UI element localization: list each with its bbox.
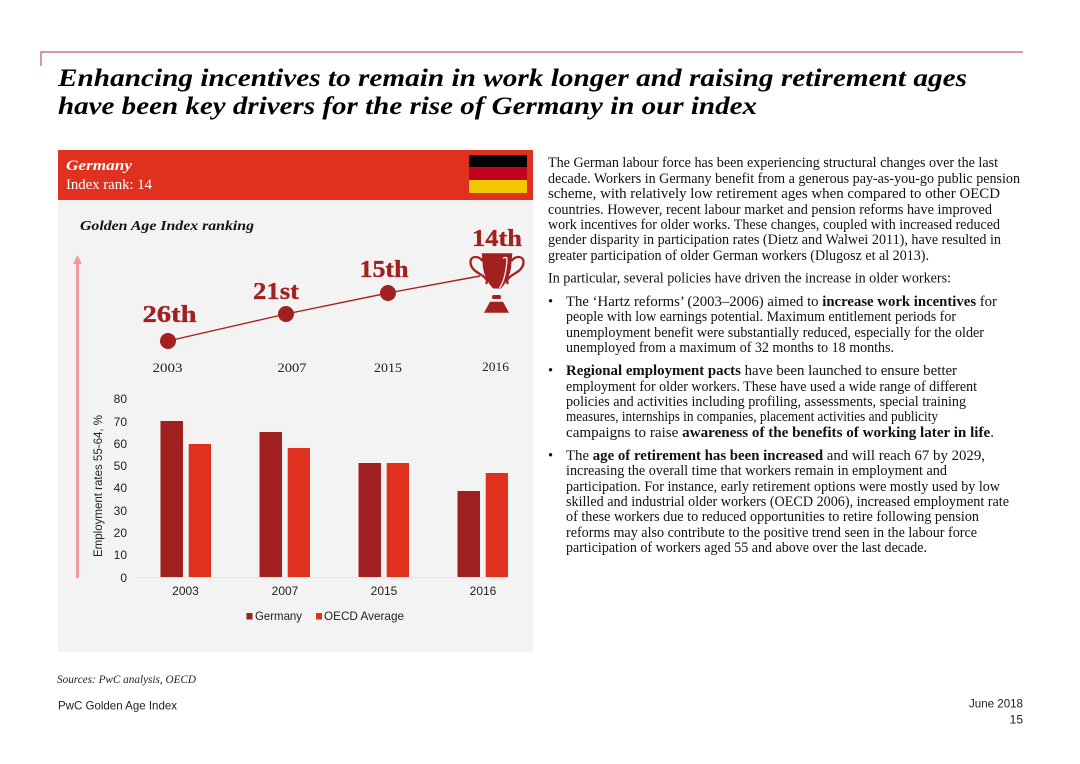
title: have been key drivers for the rise of Germany in our index [58, 91, 757, 120]
legend: OECD Average [324, 609, 404, 623]
intro paragraph: decade. Workers in Germany benefit from a generous pay-as-you-go public pension [548, 171, 1021, 187]
y axis labels: 30 [114, 504, 127, 518]
y axis labels: 10 [114, 548, 127, 562]
intro paragraph: The German labour force has been experiencing structural changes over the last [548, 155, 998, 171]
bullet: age of retirement: • [548, 448, 553, 464]
bullet: age of retirement: skilled and industrial older workers (OECD 2006), increased employment rate [566, 494, 1009, 510]
y axis labels: 20 [114, 526, 127, 540]
intro paragraph: countries. However, recent labour market and pension reforms have improved [548, 202, 993, 218]
ranking line chart: 26th [142, 302, 196, 328]
y axis labels: 50 [114, 459, 127, 473]
bars: 2003 [160, 421, 211, 577]
x axis labels: 2003 [172, 584, 199, 598]
sources note: Sources: PwC analysis, OECD [57, 674, 197, 686]
x axis labels: 2007 [272, 584, 299, 598]
y axis labels: 0 [120, 571, 127, 585]
title [57, 63, 967, 120]
y axis labels [114, 392, 127, 585]
bullet: regional employment pacts: employment for older workers. These have used a wide range of different [566, 379, 977, 395]
ranking line chart: 14th [472, 226, 522, 252]
x axis labels: 2016 [470, 584, 497, 598]
bars: 2007 [260, 432, 310, 577]
bullet: age of retirement [548, 448, 1009, 556]
arrow: upward improvement [73, 255, 82, 578]
bullet: Hartz reforms: The ‘Hartz reforms’ (2003–2006) aimed to increase work incentives for [566, 294, 997, 310]
legend: Germany [255, 609, 302, 623]
icon: German flag [469, 155, 527, 193]
intro paragraph [548, 155, 1021, 264]
panel header [58, 150, 533, 200]
ranking line chart: 21st [253, 279, 299, 305]
bullet: Hartz reforms: unemployment benefit were substantially reduced, especially for the older [566, 325, 984, 341]
bullet: age of retirement: The age of retirement has been increased and will reach 67 by 2029, [566, 448, 985, 464]
intro paragraph: greater participation of older German workers (Dlugosz et al 2013). [548, 248, 929, 264]
bullet: regional employment pacts: • [548, 363, 553, 379]
bullet: Hartz reforms: people with low earnings potential. Maximum entitlement periods for [566, 309, 956, 325]
title: Enhancing incentives to remain in work longer and raising retirement ages [57, 63, 967, 92]
bars: 2015 [358, 463, 409, 577]
intro paragraph: gender disparity in participation rates (Dietz and Walwei 2011), have resulted in [548, 232, 1002, 248]
ranking line chart: 15th [360, 257, 408, 283]
x axis labels: 2015 [371, 584, 398, 598]
bullet: age of retirement: reforms may also contribute to the positive trend seen in the labour force [566, 525, 977, 541]
ranking line chart: 2003 [152, 360, 182, 375]
panel header: Germany [66, 158, 132, 174]
bullet: Hartz reforms: • [548, 294, 553, 310]
bullet: regional employment pacts: measures, internships in companies, placement activities and publicity [566, 409, 939, 425]
ranking line chart [142, 226, 522, 375]
bullet: regional employment pacts: policies and activities including profiling, assessments, special training [566, 394, 966, 410]
lead-in sentence: In particular, several policies have driven the increase in older workers: [548, 270, 951, 286]
footer: page number: 15 [1010, 712, 1023, 726]
ranking line chart: 2016 [482, 359, 510, 374]
y axis labels: 70 [114, 415, 127, 429]
bullet: regional employment pacts [548, 363, 994, 441]
bullet: Hartz reforms: unemployed from a maximum of 32 months to 18 months. [566, 340, 894, 356]
y axis labels: 80 [114, 392, 127, 406]
ranking heading: Golden Age Index ranking [80, 219, 254, 234]
intro paragraph: scheme, with relatively low retirement ages when compared to other OECD [548, 186, 1000, 202]
footer: date: June 2018 [969, 696, 1023, 710]
y axis title: Employment rates 55-64, % [91, 415, 105, 557]
panel header: Index rank: 14 [66, 177, 152, 193]
legend [246, 609, 404, 623]
x axis labels [172, 584, 497, 598]
icon: trophy [470, 253, 524, 313]
bullet: regional employment pacts: Regional employment pacts have been launched to ensure better [566, 363, 957, 379]
bullet: age of retirement: increasing the overall time that workers remain in employment and [566, 463, 948, 479]
y axis labels: 40 [114, 481, 127, 495]
bullet: Hartz reforms [548, 294, 997, 356]
bullet: age of retirement: of these workers due to reduced opportunities to retire following pension [566, 509, 980, 525]
bullet: age of retirement: participation of workers aged 55 and above over the last decade. [566, 540, 927, 556]
bars: 2016 [458, 473, 508, 577]
footer: report name: PwC Golden Age Index [58, 698, 177, 712]
bullet: age of retirement: participation. For instance, early retirement options were mostly used by low [566, 479, 1001, 495]
y axis labels: 60 [114, 437, 127, 451]
ranking line chart: 2015 [374, 360, 402, 375]
panel: Germany profile [58, 150, 533, 652]
bullet: regional employment pacts: campaigns to raise awareness of the benefits of working later in life . [566, 425, 994, 441]
bar chart: employment rates [91, 392, 508, 623]
ranking line chart: 2007 [278, 360, 307, 375]
intro paragraph: work incentives for older works. These changes, coupled with increased reduced [548, 217, 1001, 233]
